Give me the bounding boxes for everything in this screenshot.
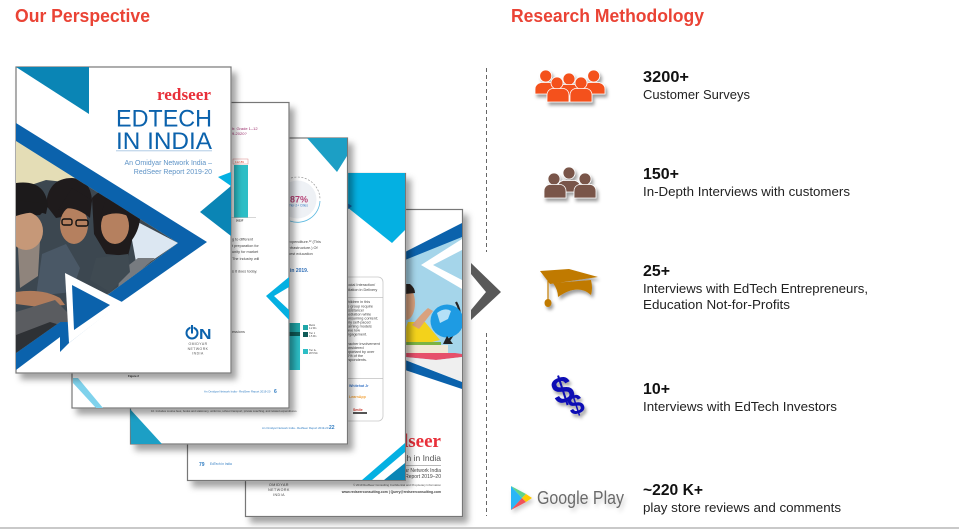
report page 4: EdTech in India: engagement.	[345, 332, 367, 336]
partner logos: Whitehat Jr	[349, 384, 369, 388]
icon: Google Play logo	[511, 486, 624, 510]
stacked chart: 28.5 Mn	[309, 352, 318, 355]
cover photo band	[405, 223, 462, 389]
Omidyar Network India logo: INDIA	[192, 352, 204, 356]
report cover: EdTech in India	[9, 67, 231, 373]
report page 5: back cover: EdTech in India	[383, 453, 441, 463]
heading: Our Perspective: Our Perspective	[15, 5, 150, 26]
arrow: chevron	[471, 263, 501, 320]
report page 4: EdTech in India: Mediation in Delivery	[342, 288, 377, 292]
report page 4: EdTech in India: Children in this	[345, 300, 370, 304]
report page 4: EdTech in India: considered	[345, 346, 364, 350]
stat: 3200+ Customer Surveys	[643, 69, 750, 102]
report page 2: market chart: 9-2020?	[232, 131, 247, 136]
cover subtitle: An Omidyar Network India –	[124, 160, 212, 167]
bar chart	[231, 159, 256, 222]
stacked chart: 4.2 Mn	[309, 327, 317, 330]
report page 2: market chart: 6	[274, 389, 277, 395]
report page 4: EdTech in India: important by over	[345, 350, 375, 354]
report page 2: market chart: The industry will	[232, 257, 259, 261]
report page 2: market chart: An Omidyar Network India - RedSeer Report 2019-20	[204, 390, 271, 394]
stat: 3200+ Customer Surveys: Customer Surveys	[643, 88, 750, 102]
stat: 10+ EdTech Investors	[643, 381, 837, 414]
stat: 25+ EdTech Entrepreneurs: 25+	[643, 263, 670, 280]
report page 2: market chart: unity for market	[232, 250, 259, 254]
icon: graduation cap	[540, 269, 598, 307]
report page 5: back cover: Omidyar Network India	[390, 468, 441, 474]
stat circle: 87% Tier-2+ Cities: Tier-2+ Cities	[289, 204, 308, 208]
icon: dollar signs: $	[564, 387, 588, 422]
report page 4: EdTech in India: EdTech in India	[210, 462, 232, 466]
stat: 25+ EdTech Entrepreneurs	[643, 263, 868, 312]
report cover: EdTech in India: RedSeer Report 2019-20	[134, 169, 212, 176]
icon: interview group	[544, 167, 596, 198]
stat: ~220 K+ play store reviews	[643, 482, 841, 515]
report page 3: spending share: expenditure.¹² (This	[288, 240, 321, 244]
report page 4: EdTech in India: learning models	[345, 324, 372, 328]
stripes bottom right	[362, 443, 405, 480]
partner logos	[349, 384, 369, 414]
report page 3: spending share: An Omidyar Network India - RedSeer Report 2019-20	[262, 426, 329, 430]
report page 5: back cover: OMIDYAR	[269, 483, 289, 487]
report page 3: spending share: 22	[329, 425, 335, 431]
report page 4: EdTech in India: only self-paced	[345, 320, 371, 324]
report page 5: back cover: RedSeer Report 2019–20	[384, 474, 441, 480]
icon: Google Play logo: Google Play	[537, 488, 624, 508]
report page 4: EdTech in India: respondents.	[345, 358, 367, 362]
Omidyar Network India logo: NETWORK	[188, 347, 209, 351]
stat: 10+ EdTech Investors: 10+	[643, 381, 670, 398]
report page 4: EdTech in India: 79	[199, 462, 205, 468]
report page 3: spending share: hest education	[288, 252, 313, 256]
stat circle: 87% Tier-2+ Cities: 87%	[290, 194, 308, 204]
rounded panel	[348, 276, 384, 422]
report page 5: back cover: www.redseerconsulting.com | Query@redseerconsulting.com	[341, 490, 441, 494]
stacked chart: Tier 1	[309, 332, 316, 335]
report page 3: spending share: infrastructure.) Of	[288, 246, 318, 250]
redseer logo: redseer	[157, 85, 211, 104]
report page 4: EdTech in India: age group require	[343, 304, 373, 308]
cover photo	[16, 141, 178, 353]
report page 4: EdTech in India: have low	[345, 328, 360, 332]
stacked chart: 4.5 Mn	[309, 335, 317, 338]
cover shapes	[16, 67, 89, 114]
stat: ~220 K+ play store reviews: play store reviews and comments	[643, 501, 841, 515]
report page 5: back cover: INDIA	[273, 493, 285, 497]
Omidyar Network India logo: OMIDYAR	[188, 342, 208, 346]
stat: 25+ EdTech Entrepreneurs: Education Not-for-Profits	[643, 298, 790, 312]
stat: 150+ In-Depth Interviews: In-Depth Interviews with customers	[643, 185, 850, 199]
Omidyar Network India logo	[186, 325, 212, 356]
report page 4: EdTech in India: mediation while	[345, 312, 371, 316]
stat: 3200+ Customer Surveys: 3200+	[643, 69, 689, 86]
icon: dollar signs	[546, 368, 588, 422]
report page 2: market chart: essions	[232, 330, 245, 334]
stacked chart: Tier 2+	[309, 349, 317, 352]
icon: dollar signs: $	[546, 368, 580, 414]
report page 4: EdTech in India: Social Interaction/	[345, 283, 376, 287]
report page 5: back cover	[246, 210, 464, 516]
report page 5: back cover: NETWORK	[268, 488, 290, 492]
report page 4: EdTech in India: assistance/	[345, 308, 365, 312]
white triangle	[65, 273, 122, 343]
heading: Research Methodology: Research Methodology	[511, 5, 705, 26]
divider: dashed line	[486, 68, 488, 516]
report page 4: EdTech in India	[188, 173, 406, 480]
bar chart: 112.89	[235, 160, 244, 164]
bar chart: 2022F	[236, 218, 244, 222]
stacked chart	[288, 323, 318, 370]
report page 2: market chart: g to different	[232, 238, 254, 242]
report page 5: back cover: redseer	[381, 431, 442, 452]
partner logos: LearnApp	[349, 395, 367, 399]
stat: 150+ In-Depth Interviews	[643, 166, 850, 199]
report page 2: market chart: s it does today.	[232, 270, 257, 274]
stat: 10+ EdTech Investors: Interviews with EdTech Investors	[643, 400, 837, 414]
stat: 150+ In-Depth Interviews: 150+	[643, 166, 679, 183]
icon: customers group	[535, 70, 605, 102]
report cover: EdTech in India: IN INDIA	[116, 128, 212, 155]
report page 4: EdTech in India: Teacher involvement	[345, 342, 381, 346]
report page 2: market chart	[72, 102, 289, 408]
report page 3: spending share: 10. Includes course fees, books and stationery, uniforms, school transport, private coaching, and related expenditures.	[151, 409, 297, 413]
report page 4: EdTech in India: consuming content;	[345, 316, 378, 320]
report page 2: market chart: h: Grade 1–12	[232, 126, 258, 131]
report page 3: spending share	[130, 138, 348, 444]
stat circle: 87% Tier-2+ Cities	[290, 176, 320, 223]
partner logos: Smile	[353, 408, 363, 412]
report page 5: back cover: © 2019 RedSeer Consulting Confidential and Proprietary Information	[353, 483, 441, 487]
Omidyar Network India logo: N	[199, 326, 212, 343]
report page 2: market chart: Figure 2	[128, 374, 139, 378]
stat: ~220 K+ play store reviews: ~220 K+	[643, 482, 703, 499]
report page 2: market chart: t preparation for	[232, 244, 260, 248]
cover title: EDTECH	[116, 106, 212, 132]
stacked chart: Metro	[309, 324, 316, 327]
report page 3: spending share: in 2019.	[290, 268, 309, 274]
stat: 25+ EdTech Entrepreneurs: Interviews with EdTech Entrepreneurs,	[643, 282, 868, 296]
report page 4: EdTech in India: 70% of the	[345, 354, 363, 358]
